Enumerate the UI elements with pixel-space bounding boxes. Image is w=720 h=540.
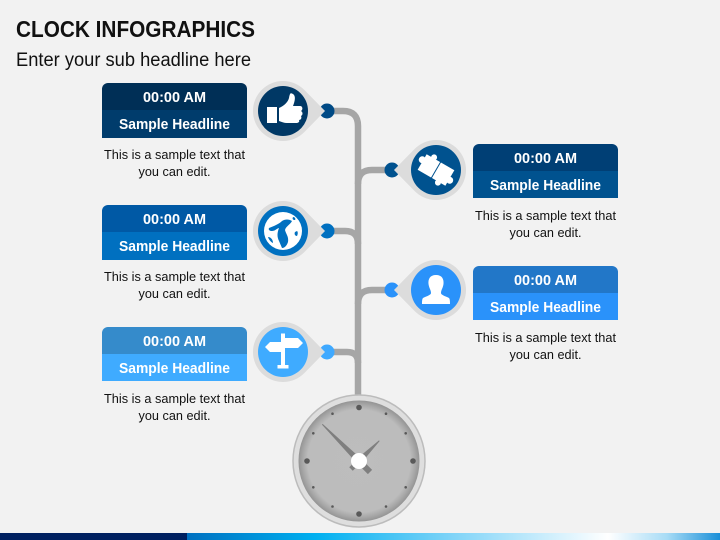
icon: puzzle pieces [412,148,460,192]
icon: thumbs up [267,93,302,123]
card: item 5: you can edit. [138,408,210,423]
pin: thumbs up [253,81,334,141]
card: item 1: This is a sample text that [104,147,245,162]
card: item 4 [473,266,618,362]
minute hand [322,424,370,472]
card: item 3: you can edit. [138,286,210,301]
clock face [298,400,420,522]
pin: globe [253,201,334,261]
card: item 4: 00:00 AM [514,272,577,289]
bottom bar [0,533,720,540]
card: item 2: Sample Headline [490,177,601,194]
card: item 1 [102,83,247,179]
card: item 5: This is a sample text that [104,391,245,406]
card: item 3: 00:00 AM [143,211,206,228]
card: item 5: 00:00 AM [143,333,206,350]
card: item 3: Sample Headline [119,238,230,255]
timeline connector [330,111,396,396]
card: item 1: you can edit. [138,164,210,179]
card: item 2 [473,144,618,240]
hour markers [304,405,416,517]
card: item 2: 00:00 AM [514,150,577,167]
clock [293,395,425,527]
subtitle: Enter your sub headline here [16,50,251,71]
card: item 3 [102,205,247,301]
card: item 1: Sample Headline [119,116,230,133]
card: item 2: you can edit. [510,225,582,240]
card: item 4: Sample Headline [490,299,601,316]
hour hand [351,441,379,469]
card: item 5 [102,327,247,423]
pin: signpost [253,322,334,382]
clock hub [351,453,367,469]
card: item 3: This is a sample text that [104,269,245,284]
card: item 5: Sample Headline [119,360,230,377]
icon: signpost [265,334,303,368]
card: item 2: This is a sample text that [475,208,616,223]
pin: puzzle [384,140,466,200]
icon: person [422,275,450,304]
card: item 4: you can edit. [510,347,582,362]
title: CLOCK INFOGRAPHICS [16,16,255,42]
pin: person [384,260,466,320]
card: item 1: 00:00 AM [143,89,206,106]
icon: globe [264,212,302,250]
card: item 4: This is a sample text that [475,330,616,345]
